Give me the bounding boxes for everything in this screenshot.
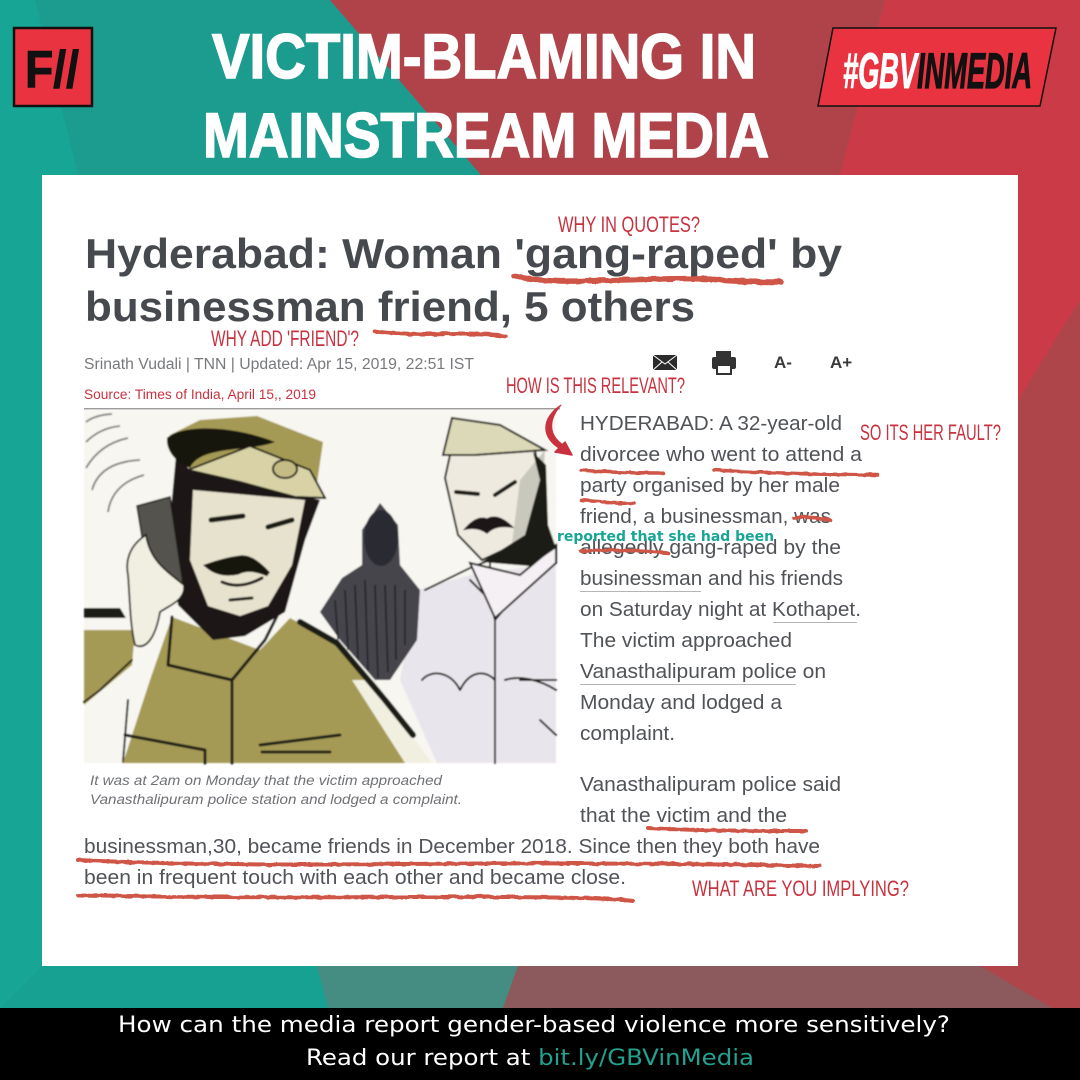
article headline [85,230,843,330]
hashtag badge: #GBVINMEDIA [818,28,1056,106]
article body text [84,413,863,889]
article body text: party organised by her male [580,475,840,497]
article body text: allegedly gang-raped by the [580,537,841,559]
article body text: friend, a businessman, was [580,506,831,528]
title: VICTIM-BLAMING IN [212,22,756,92]
white arm [84,660,132,762]
phone signal [86,414,144,512]
article headline: businessman friend, 5 others [85,283,695,330]
footer bar: How can the media report gender-based violence more sensitively? [118,1012,950,1038]
photo caption: Vanasthalipuram police station and lodged a complaint. [90,792,462,807]
logo: F//: F// [25,41,79,99]
dark man [320,503,420,680]
phone and hand [137,497,184,598]
icon: print [712,351,736,374]
correction: reported that she had been: reported that she had been [557,529,774,545]
annotation: so its her fault: SO ITS HER FAULT? [860,420,1001,445]
byline: Srinath Vudali | TNN | Updated: Apr 15, 2019, 22:51 IST [84,356,475,373]
title [203,22,769,171]
footer bar: Read our report at bit.ly/GBVinMedia [306,1045,754,1071]
annotation: what are you implying: WHAT ARE YOU IMPLYING? [692,876,909,901]
article body text: businessman,30, became friends in December 2018. Since then they both have [84,836,820,858]
lavender officer collar [470,545,556,618]
annotation: how is this relevant: HOW IS THIS RELEVANT? [506,373,685,398]
right officer head [445,450,540,560]
title: MAINSTREAM MEDIA [203,101,769,171]
illustration: police officers [84,410,556,763]
article body text: on Saturday night at Kothapet. [580,599,861,621]
article body text: The victim approached [580,630,792,652]
red underlines [78,276,878,901]
annotation: why in quotes: WHY IN QUOTES? [558,212,700,237]
main officer hair and jaw [170,455,320,640]
photo caption: It was at 2am on Monday that the victim approached [90,773,443,788]
main officer body [123,617,415,763]
annotation: why add friend: WHY ADD 'FRIEND'? [211,326,359,351]
article body text: been in frequent touch with each other and became close. [84,867,626,889]
lavender officer body [400,563,556,763]
rule [84,408,560,410]
article body text: businessman and his friends [580,568,843,590]
article headline: Hyderabad: Woman 'gang-raped' by [85,230,843,277]
article body text: that the victim and the [580,805,787,827]
article body text: HYDERABAD: A 32-year-old [580,413,842,435]
icon: mail [653,355,677,370]
font size controls [774,353,852,372]
arrow: curved to body text [546,405,572,455]
photo caption [90,773,462,807]
panel: news article card [42,175,1018,966]
article body text: divorcee who went to attend a [580,444,863,466]
left band and sleeve [84,608,126,618]
source credit: Source: Times of India, April 15,, 2019 [84,387,316,402]
logo: F// [14,28,92,106]
article body text: Monday and lodged a [580,692,783,714]
footer bar [0,1008,1080,1080]
article body text: Vanasthalipuram police said [580,774,841,796]
grey link underlines [580,592,857,684]
article body text: Vanasthalipuram police on [580,661,826,683]
article body text: complaint. [580,723,675,745]
main officer cap [170,416,323,483]
font size controls: A+ [830,353,852,372]
font size controls: A- [774,353,792,372]
